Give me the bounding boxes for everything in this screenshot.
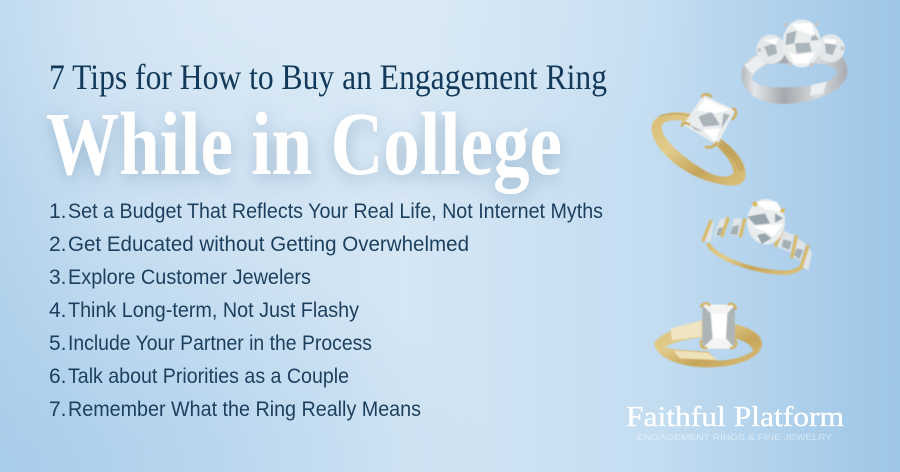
icon: gold radiant-cut ring bbox=[652, 94, 746, 186]
tip 4: Think Long-term, Not Just Flashy bbox=[68, 299, 359, 322]
tip 7: 7. bbox=[49, 398, 67, 421]
tip 5: Include Your Partner in the Process bbox=[68, 332, 372, 355]
tip 2: Get Educated without Getting Overwhelmed bbox=[68, 233, 469, 256]
tip 5: 5. bbox=[49, 332, 67, 355]
tip 3: 3. bbox=[49, 266, 67, 289]
logo tagline: ENGAGEMENT RINGS & FINE JEWELRY bbox=[637, 432, 832, 442]
tip 6: Talk about Priorities as a Couple bbox=[68, 365, 349, 388]
tip 4: 4. bbox=[49, 299, 67, 322]
icon: gold oval ring with side stones bbox=[703, 199, 812, 273]
logo: Faithful Platform bbox=[626, 401, 844, 442]
logo wordmark: Faithful Platform bbox=[626, 401, 844, 433]
tip 2: 2. bbox=[49, 233, 67, 256]
tip 7: Remember What the Ring Really Means bbox=[68, 398, 421, 421]
heading: 7 Tips for How to Buy an Engagement Ring: 7 Tips for How to Buy an Engagement Ring bbox=[49, 57, 607, 97]
heading: While in College: While in College bbox=[46, 95, 562, 194]
icon: gold emerald-cut ring bbox=[654, 303, 762, 367]
tips list bbox=[49, 200, 603, 421]
tip 3: Explore Customer Jewelers bbox=[68, 266, 311, 289]
tip 6: 6. bbox=[49, 365, 67, 388]
icon: silver three-stone ring bbox=[742, 19, 847, 104]
tip 1: Set a Budget That Reflects Your Real Life, Not Internet Myths bbox=[68, 200, 603, 223]
tip 1: 1. bbox=[49, 200, 67, 223]
